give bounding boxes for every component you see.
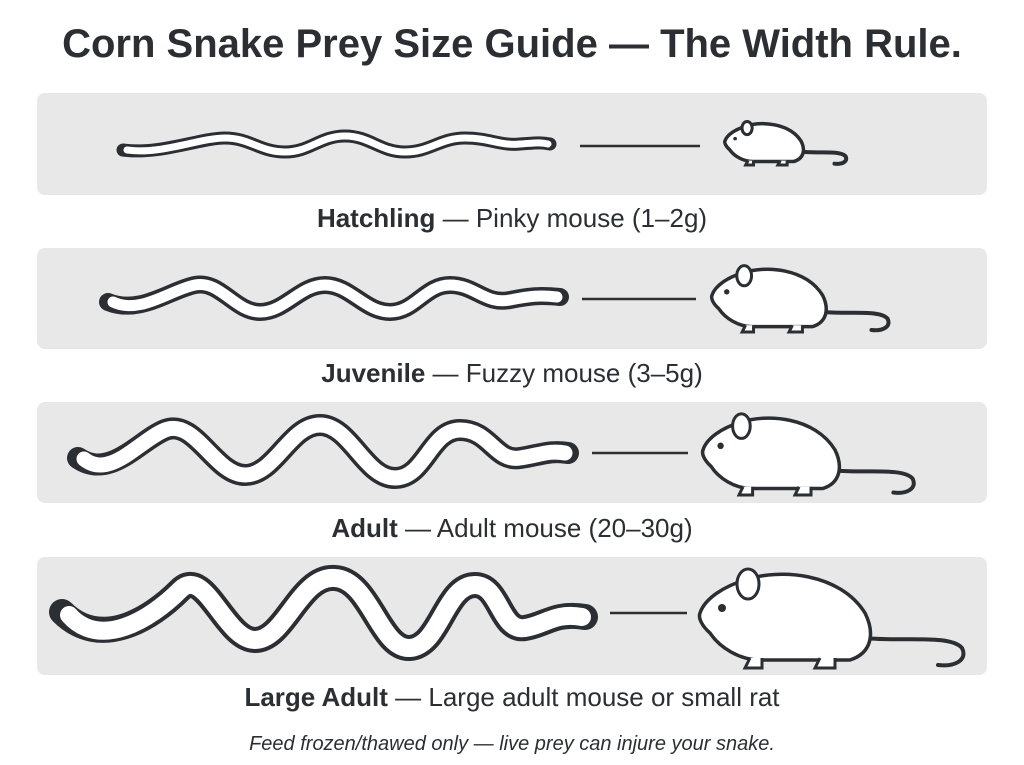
snake: hatchling: [123, 136, 550, 152]
snake: juvenile: [108, 284, 560, 312]
mouse: fuzzy: [712, 266, 889, 332]
panel: juvenile: [37, 248, 987, 349]
label: adult: Adult — Adult mouse (20–30g): [331, 513, 693, 543]
panel: hatchling: [37, 93, 987, 195]
panel: large adult: [37, 557, 987, 675]
label: hatchling: Hatchling — Pinky mouse (1–2g): [317, 203, 707, 233]
snake: adult: [78, 425, 568, 478]
label: juvenile: Juvenile — Fuzzy mouse (3–5g): [321, 358, 703, 388]
label: large adult: Large Adult — Large adult mouse or small rat: [244, 682, 780, 712]
footer note: Feed frozen/thawed only — live prey can injure your snake.: [249, 733, 775, 755]
snake: large adult: [62, 578, 585, 648]
mouse: adult: [703, 414, 914, 495]
mouse: large: [699, 569, 963, 668]
panel: adult: [37, 402, 987, 503]
mouse: pinky: [725, 121, 846, 165]
connector lines: [580, 146, 700, 613]
title: Corn Snake Prey Size Guide — The Width Rule.: [62, 22, 962, 66]
